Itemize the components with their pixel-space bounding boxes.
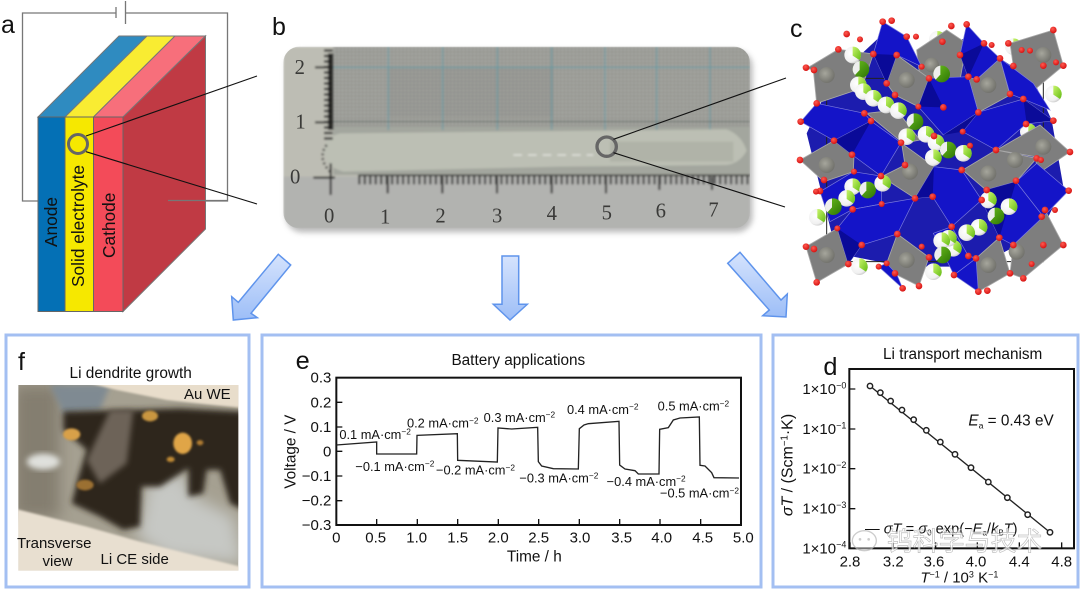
x axis title: Time / h xyxy=(507,549,562,566)
y axis title: Voltage / V xyxy=(283,414,300,489)
photo annotation: Au WE: Au WE xyxy=(184,386,231,403)
ruler numbers: 6 xyxy=(656,200,666,222)
y axis tick labels: 0.1 xyxy=(310,419,331,436)
x axis tick labels: 5.0 xyxy=(733,530,754,547)
solid electrolyte layer: Solid electrolyte xyxy=(68,165,88,287)
cathode layer xyxy=(94,117,123,312)
x axis title: T xyxy=(920,569,931,586)
current density labels: −2 xyxy=(546,410,556,420)
lithium and chlorine spheres xyxy=(825,47,1017,280)
fit equation: 0 xyxy=(927,528,932,537)
ruler xyxy=(358,173,750,178)
wire inside side face xyxy=(168,200,227,202)
x axis title: −1 xyxy=(988,569,998,579)
x axis title: −1 xyxy=(929,569,940,579)
current density labels: −2 xyxy=(469,415,479,425)
arrow: a/b to panel f xyxy=(232,254,291,320)
x axis tick labels: 2.5 xyxy=(528,530,549,547)
ruler numbers: 0 xyxy=(290,166,300,188)
magnifier circle xyxy=(68,134,88,154)
photo annotation: Li CE side: Li CE side xyxy=(100,551,169,568)
watermark: 钨科学与技术 xyxy=(887,527,1043,557)
chart e title: Battery applications xyxy=(451,352,586,369)
x axis tick labels: 2.8 xyxy=(840,554,860,571)
panel label e: e xyxy=(296,347,310,375)
current density labels: −2 xyxy=(401,427,411,437)
y axis tick labels: −0.3 xyxy=(302,517,331,534)
zoom lines b to c xyxy=(614,78,786,207)
current density labels: −2 xyxy=(425,459,435,469)
current density labels: 0.2 mA·cm xyxy=(407,416,469,431)
panel f: Li dendrite growth xyxy=(6,335,249,587)
y axis tick labels: 1×10 xyxy=(802,501,836,518)
x axis tick labels: 3.5 xyxy=(611,530,632,547)
plot frame and ticks xyxy=(336,378,741,525)
photo annotation: Transverse view xyxy=(17,535,91,570)
anode layer: Anode xyxy=(41,197,61,247)
fit equation: a xyxy=(982,528,987,537)
current density labels: 0.4 mA·cm xyxy=(567,402,629,417)
zoom lines a to b xyxy=(86,76,257,204)
x axis tick labels: 2.0 xyxy=(488,530,509,547)
y axis tick labels: −4 xyxy=(836,540,846,550)
y axis tick labels: −1 xyxy=(836,420,846,430)
x axis tick labels: 4.8 xyxy=(1051,554,1072,571)
x axis tick labels: 4.4 xyxy=(1009,554,1030,571)
data points xyxy=(867,383,1053,535)
current density labels: 0.5 mA·cm xyxy=(658,399,720,414)
label a: a xyxy=(1,11,15,39)
ruler numbers: 0 xyxy=(324,206,334,228)
fit equation: exp(− xyxy=(932,521,973,537)
y axis tick labels xyxy=(302,370,331,534)
chart e xyxy=(283,347,754,566)
y axis tick labels: 0.3 xyxy=(310,370,331,387)
panel label f: f xyxy=(18,348,25,376)
y axis tick labels: −0.2 xyxy=(302,493,331,510)
y axis tick labels: −3 xyxy=(836,500,846,510)
y axis tick labels: −2 xyxy=(836,460,846,470)
blue octahedra xyxy=(801,22,1069,292)
ruler numbers: 3 xyxy=(492,206,502,228)
current density labels: 0.1 mA·cm xyxy=(339,427,401,442)
ruler numbers xyxy=(290,57,719,228)
x axis tick labels: 3.6 xyxy=(924,554,944,571)
shaded octahedron facets xyxy=(834,43,1053,264)
ruler numbers: 7 xyxy=(708,200,719,222)
x axis tick labels: 0.5 xyxy=(365,530,386,547)
panel d: Li transport mechanism xyxy=(773,335,1078,587)
x axis tick labels xyxy=(840,554,1072,571)
gray octahedron center spheres xyxy=(819,47,1051,273)
current density labels: −2 xyxy=(730,485,739,495)
fit equation: E xyxy=(973,521,983,537)
y axis tick labels: 1×10 xyxy=(802,381,836,398)
current density labels: −2 xyxy=(676,474,686,484)
crystal backing mass xyxy=(807,37,1063,267)
x axis tick labels xyxy=(332,530,754,547)
fit equation: — σT = σ xyxy=(865,521,927,537)
oxygen atoms xyxy=(797,17,1073,295)
fit equation: B xyxy=(998,528,1004,537)
x axis title: / 10 xyxy=(940,569,969,586)
x axis tick labels: 3.0 xyxy=(570,530,590,547)
cathode layer: Cathode xyxy=(99,193,119,258)
y axis tick labels: −0 xyxy=(836,380,846,390)
x axis tick labels: 3.2 xyxy=(883,554,904,571)
fit equation: / xyxy=(987,521,992,537)
y axis tick labels: 0 xyxy=(323,443,331,460)
chart d xyxy=(780,346,1074,586)
y axis tick labels: −0.1 xyxy=(302,468,331,485)
x axis tick labels: 4.5 xyxy=(692,530,713,547)
current density labels: −0.2 mA·cm xyxy=(436,463,506,478)
x axis tick labels: 1.5 xyxy=(447,530,468,547)
ruler numbers: 1 xyxy=(295,111,306,133)
x axis tick labels: 1.0 xyxy=(406,530,427,547)
x axis tick labels: 0 xyxy=(332,530,341,547)
current density labels: 0.3 mA·cm xyxy=(484,410,546,425)
battery top faces xyxy=(38,36,206,117)
current density labels: −0.1 mA·cm xyxy=(355,459,425,474)
photo annotation: Transverse view: view xyxy=(42,553,73,570)
solid electrolyte layer xyxy=(65,117,94,312)
current density labels: −2 xyxy=(506,462,515,472)
voltage curve xyxy=(336,417,739,478)
chart d title: Li transport mechanism xyxy=(883,346,1042,363)
label b: b xyxy=(272,13,286,41)
ruler numbers: 2 xyxy=(295,57,305,79)
rod xyxy=(324,129,747,172)
activation energy label: = 0.43 eV xyxy=(983,413,1054,430)
anode layer xyxy=(38,117,65,312)
y axis tick labels xyxy=(802,380,846,557)
current density labels: −0.5 mA·cm xyxy=(660,486,730,501)
activation energy label: E xyxy=(968,413,979,430)
panel a: battery schematic xyxy=(22,1,228,312)
plot frame and ticks xyxy=(849,369,1074,548)
current density labels: −0.3 mA·cm xyxy=(519,471,589,486)
fit equation: ) xyxy=(1013,521,1017,537)
battery side face xyxy=(123,36,206,312)
panel e: battery applications xyxy=(262,335,761,587)
panel f title: Li dendrite growth xyxy=(70,365,192,382)
x axis title: 3 xyxy=(969,569,974,579)
current density labels: −2 xyxy=(720,398,730,408)
panel label d: d xyxy=(823,353,837,381)
arrow: c to panel d xyxy=(728,252,787,317)
ruler numbers: 5 xyxy=(602,202,612,224)
x axis tick labels: 4.0 xyxy=(651,530,672,547)
micrograph xyxy=(13,380,243,575)
arrow: b to panel e xyxy=(493,256,527,320)
y axis tick labels: 1×10 xyxy=(802,421,836,438)
y axis tick labels: 1×10 xyxy=(802,461,836,478)
panel c: crystal structure xyxy=(797,17,1073,295)
ruler numbers: 4 xyxy=(547,203,557,225)
circuit wire with battery symbol xyxy=(22,1,228,201)
y axis title: −1 xyxy=(780,435,791,446)
current density labels: −2 xyxy=(629,402,639,412)
x axis title: K xyxy=(974,569,988,586)
current density labels xyxy=(339,398,739,501)
y axis title: ·K) xyxy=(780,414,797,435)
panel b: photograph of electrolyte rod xyxy=(283,47,753,232)
Arrhenius fit line xyxy=(870,386,1050,532)
activation energy label: a xyxy=(979,420,984,430)
y axis tick labels: 0.2 xyxy=(310,394,331,411)
ruler numbers: 2 xyxy=(435,206,446,228)
gray octahedra xyxy=(800,30,1070,292)
magnifier circle on rod xyxy=(597,137,616,156)
y axis title: σT / (Scm xyxy=(780,446,797,516)
label c: c xyxy=(790,15,802,43)
y axis tick labels: 1×10 xyxy=(802,540,836,557)
fit equation: T xyxy=(1004,521,1014,537)
unit cell frame and back atoms xyxy=(809,31,1062,275)
current density labels: −2 xyxy=(589,470,599,480)
fit equation: k xyxy=(991,521,999,537)
x axis tick labels: 4.0 xyxy=(966,554,986,571)
ruler numbers: 1 xyxy=(380,206,390,228)
photo annotation: Transverse view: Transverse xyxy=(17,535,91,552)
current density labels: −0.4 mA·cm xyxy=(607,474,676,489)
